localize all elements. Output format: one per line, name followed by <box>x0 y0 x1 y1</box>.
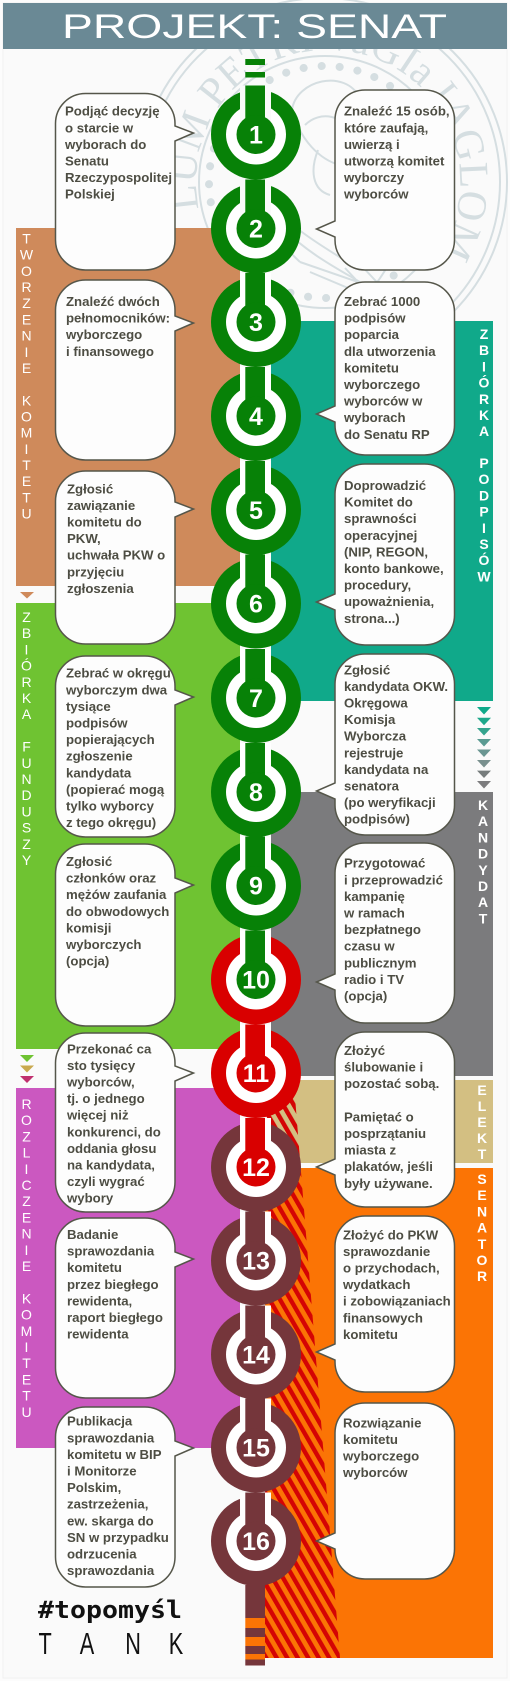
station 12: 12 <box>242 1154 270 1182</box>
panel: elekt: L <box>478 1098 487 1114</box>
bubble: step 4: wyborczego <box>343 377 420 392</box>
bubble: step 2: wyborczy <box>343 170 405 185</box>
bubble: step 4: poparcia <box>344 327 400 342</box>
station 14 <box>211 1306 301 1400</box>
bubble: step 7: (popierać mogą <box>66 782 165 797</box>
bubble: step 11: sto tysięcy <box>67 1058 136 1073</box>
bubble: step 13 <box>56 1218 194 1398</box>
bubble: step 7: tysiące <box>66 699 111 714</box>
bubble: step 3: i finansowego <box>66 344 154 359</box>
panel: zbiorka funduszy: Z <box>22 836 31 852</box>
panel: zbiorka funduszy: R <box>21 674 32 690</box>
panel: kandydat: A <box>478 813 488 829</box>
panel: rozliczenie komitetu: R <box>21 1096 32 1112</box>
bubble: step 2: utworzą komitet <box>344 154 445 168</box>
bubble: step 2: które zaufają, <box>344 120 428 135</box>
bubble: step 5: przyjęciu <box>67 564 124 579</box>
station 5 <box>211 461 301 555</box>
bubble: step 15: sprawozdania <box>67 1563 155 1578</box>
bubble: step 8: podpisów) <box>344 812 410 827</box>
panel: zbiorka funduszy <box>16 603 240 1049</box>
bubble: step 14: i zobowiązaniach <box>343 1294 451 1309</box>
panel: kandydat <box>271 792 493 1076</box>
bubble: step 10: i przeprowadzić <box>344 872 443 887</box>
bubble: step 4 <box>316 282 454 455</box>
bubble: step 4: do Senatu RP <box>344 427 430 442</box>
bubble: step 10: publicznym <box>344 955 417 970</box>
bubble: step 13: rewidenta, <box>67 1293 132 1308</box>
bubble: step 15 <box>56 1407 194 1587</box>
bubble: step 10: bezpłatnego <box>344 922 421 937</box>
panel: zbiorka funduszy: Z <box>22 609 31 625</box>
bubble: step 11: wyborców, <box>66 1074 135 1090</box>
bubble: step 11 <box>56 1033 194 1212</box>
panel: zbiorka funduszy: K <box>22 690 32 706</box>
bubble: step 13: przez biegłego <box>67 1277 159 1292</box>
bubble: step 14: komitetu <box>343 1327 398 1342</box>
bubble: step 11: wybory <box>66 1191 114 1206</box>
bubble: step 4: podpisów <box>344 311 406 326</box>
bubble: step 5: Zgłosić <box>67 481 113 496</box>
bubble: step 13: rewidenta <box>67 1327 129 1342</box>
bubble: step 4: Zebrać 1000 <box>344 294 420 309</box>
panel: senator: N <box>477 1203 487 1219</box>
bubble: step 15: i Monitorze <box>67 1464 137 1478</box>
bubble: step 1: Rzeczypospolitej <box>65 170 172 185</box>
bubble: step 10: czasu w <box>344 939 395 954</box>
panel: zbiorka funduszy: U <box>21 755 32 771</box>
bubble: step 3: Znaleźć dwóch <box>66 294 160 309</box>
bubble: step 14: Złożyć do PKW <box>343 1227 439 1242</box>
station 11: 11 <box>243 1060 269 1088</box>
bubble: step 12: Złożyć <box>344 1043 385 1058</box>
bubble: step 13: komitetu <box>67 1260 122 1275</box>
bubble: step 12 <box>316 1032 454 1207</box>
station 15: 15 <box>242 1434 270 1462</box>
bubble: step 6 <box>316 464 454 645</box>
panel: rozliczenie komitetu: C <box>21 1177 32 1193</box>
bubble: step 7: Zebrać w okręgu <box>66 666 171 681</box>
panel: zbiorka podpisow <box>271 321 493 701</box>
panel: rozliczenie komitetu: K <box>22 1290 32 1306</box>
arrow: to zbiorka funduszy <box>20 592 34 598</box>
path tail with stripes <box>245 1585 265 1666</box>
logo: #topomysl tank: N <box>125 1626 141 1661</box>
panel: tworzenie komitetu: M <box>21 425 32 441</box>
bubble: step 1: wyborach do <box>64 137 146 152</box>
bubble: step 4: wyborach <box>343 410 406 425</box>
station 16 <box>211 1492 301 1586</box>
bubble: step 7: zgłoszenie <box>66 749 133 764</box>
panel: elekt: K <box>477 1130 487 1146</box>
station 11 <box>211 1024 301 1118</box>
bubble: step 5: zawiązanie <box>67 498 135 513</box>
bubble: step 16: wyborczego <box>342 1448 419 1464</box>
panel: zbiorka funduszy: D <box>21 787 32 803</box>
top dashes of the path <box>245 59 265 78</box>
bubble: step 9: do obwodowych <box>66 904 169 919</box>
panel: rozliczenie komitetu: I <box>25 1339 28 1355</box>
bubble: step 7: wyborczym dwa <box>65 682 168 697</box>
bubble: step 7: z tego okręgu) <box>66 815 156 830</box>
bubble: step 6: operacyjnej <box>344 528 417 543</box>
station 4 <box>211 367 301 461</box>
bubble: step 1: Polskiej <box>65 187 115 202</box>
bubble: step 4: komitetu <box>344 360 399 375</box>
bubble: step 10: w ramach <box>343 906 405 920</box>
panel: tworzenie komitetu: T <box>22 489 31 505</box>
bubble: step 9 <box>56 844 194 1026</box>
station 1: 1 <box>249 122 263 150</box>
panel: rozliczenie komitetu <box>16 1088 240 1448</box>
station 6 <box>211 554 301 648</box>
panel: elekt <box>271 1080 493 1163</box>
bubble: step 16: komitetu <box>343 1432 398 1447</box>
panel: kandydat: D <box>478 846 488 862</box>
station 13 <box>211 1212 301 1306</box>
bubble: step 6: upoważnienia, <box>344 594 434 609</box>
panel: tworzenie komitetu: O <box>21 263 32 279</box>
bubble: step 3: wyborczego <box>65 327 142 342</box>
bubble: step 12: plakatów, jeśli <box>344 1159 433 1174</box>
logo: #topomysl tank: K <box>169 1626 183 1661</box>
bubble: step 1: Senatu <box>65 154 109 168</box>
arrows: to kandydat <box>477 707 491 788</box>
bubble: step 2: uwierzą i <box>344 137 400 152</box>
panel: rozliczenie komitetu: T <box>22 1355 31 1371</box>
panel: tworzenie komitetu: T <box>22 457 31 473</box>
panel: rozliczenie komitetu: Z <box>22 1193 31 1209</box>
bubble: step 7: popierających <box>66 732 155 747</box>
bubble: step 11: czyli wygrać <box>67 1174 145 1189</box>
bubble: step 6: (NIP, REGON, <box>344 544 428 559</box>
bubble: step 11: Przekonać ca <box>67 1041 152 1056</box>
bubble: step 12: Pamiętać o <box>344 1109 414 1124</box>
panel: zbiorka funduszy: B <box>22 625 31 641</box>
station 13: 13 <box>242 1248 270 1276</box>
panel: kandydat: Y <box>478 862 488 878</box>
panel: tworzenie komitetu: I <box>25 344 28 360</box>
bubble: step 9: członków oraz <box>66 871 157 886</box>
panel: zbiorka funduszy: Y <box>22 852 32 868</box>
panel: zbiorka podpisow: P <box>479 455 489 471</box>
panel: tworzenie komitetu: E <box>22 473 31 489</box>
panel: rozliczenie komitetu: O <box>21 1307 32 1323</box>
bubble: step 13: sprawozdania <box>67 1244 155 1259</box>
panel: tworzenie komitetu <box>16 228 240 586</box>
panel: kandydat: N <box>478 829 488 845</box>
panel: elekt: E <box>477 1114 487 1130</box>
station 10: 10 <box>242 966 270 994</box>
panel: zbiorka podpisow: Ó <box>479 374 490 391</box>
bubble: step 15: Polskim, <box>67 1480 121 1495</box>
panel: rozliczenie komitetu: L <box>23 1145 31 1161</box>
title banner <box>3 3 507 49</box>
bubble: step 4: wyborców w <box>343 394 423 409</box>
bubble: step 12: miasta z <box>344 1143 396 1158</box>
station 14: 14 <box>242 1342 270 1370</box>
panel: kandydat: D <box>478 878 488 894</box>
panel: zbiorka podpisow: O <box>479 471 490 487</box>
panel: zbiorka podpisow: D <box>479 487 489 503</box>
panel: zbiorka podpisow: I <box>482 358 486 374</box>
panel: senator: O <box>477 1252 488 1268</box>
panel: tworzenie komitetu: E <box>22 311 31 327</box>
logo: #topomysl tank: #topomyśl <box>38 1596 182 1624</box>
station 8 <box>211 743 301 837</box>
bubble: step 1 <box>56 94 194 270</box>
panel: rozliczenie komitetu: Z <box>22 1128 31 1144</box>
panel: tworzenie komitetu: W <box>20 247 34 263</box>
bubble: step 8: Zgłosić <box>344 662 390 677</box>
logo: #topomysl tank <box>38 1596 183 1661</box>
bubble: step 15: komitetu w BIP <box>67 1447 162 1462</box>
station 10 <box>211 930 301 1024</box>
station 15 <box>211 1398 301 1492</box>
panel: zbiorka funduszy: I <box>25 641 28 657</box>
bubble: step 6: konto bankowe, <box>344 561 444 576</box>
bubble: step 14: sprawozdanie <box>343 1244 430 1259</box>
bubble: step 8: (po weryfikacji <box>344 795 436 810</box>
panel: kandydat: A <box>478 894 488 910</box>
station 16: 16 <box>242 1528 270 1556</box>
panel: zbiorka podpisow: Z <box>480 326 489 342</box>
bubble: step 8: rejestruje <box>344 745 403 760</box>
station 2: 2 <box>249 216 263 244</box>
bubble: step 7: tylko wyborcy <box>66 798 155 814</box>
bubble: step 5: komitetu do <box>67 514 142 530</box>
panel: zbiorka podpisow: Ó <box>479 551 490 568</box>
bubble: step 9: (opcja) <box>66 954 109 969</box>
bubble: step 13: raport biegłego <box>67 1310 163 1325</box>
bubble: step 5: PKW, <box>67 531 101 546</box>
bubble: step 12: były używane. <box>344 1176 433 1191</box>
panel: rozliczenie komitetu: E <box>22 1258 31 1274</box>
panel: zbiorka funduszy: N <box>21 771 32 787</box>
bubble: step 8: Okręgowa <box>344 696 408 710</box>
bubble: step 10: radio i TV <box>344 972 404 987</box>
panel: zbiorka funduszy: Ó <box>21 658 32 674</box>
bubble: step 5: zgłoszenia <box>67 581 134 596</box>
bubble: step 8: senatora <box>344 778 400 794</box>
panel: rozliczenie komitetu: N <box>21 1226 32 1242</box>
panel: rozliczenie komitetu: E <box>22 1371 31 1387</box>
panel: zbiorka podpisow: P <box>479 504 489 520</box>
bubble: step 12: pozostać sobą. <box>344 1076 439 1091</box>
panel: zbiorka podpisow: K <box>479 407 489 423</box>
panel: zbiorka funduszy: S <box>22 820 31 836</box>
panel: zbiorka podpisow: I <box>482 520 486 536</box>
panel: rozliczenie komitetu: I <box>25 1161 28 1177</box>
panel: rozliczenie komitetu: O <box>21 1112 32 1128</box>
panel: tworzenie komitetu: E <box>22 360 31 376</box>
panel: rozliczenie komitetu: I <box>25 1242 28 1258</box>
station 2 <box>211 180 301 274</box>
station 8: 8 <box>249 779 263 807</box>
bubble: step 10: Przygotować <box>344 856 425 871</box>
bubble: step 16: Rozwiązanie <box>343 1415 421 1430</box>
bubble: step 11: oddania głosu <box>67 1141 156 1156</box>
bubble: step 2: wyborców <box>343 187 409 202</box>
panel: tworzenie komitetu: R <box>21 279 32 295</box>
bubble: step 12: ślubowanie i <box>344 1060 423 1075</box>
bubble: step 11: konkurenci, do <box>67 1124 161 1139</box>
bubble: step 8 <box>316 654 454 835</box>
bubble: step 9: mężów zaufania <box>66 887 167 902</box>
station 12 <box>211 1118 301 1212</box>
station 7: 7 <box>249 685 263 713</box>
bubble: step 12: posprzątaniu <box>344 1126 426 1141</box>
panel: kandydat: K <box>478 797 488 813</box>
panel: senator: E <box>477 1187 487 1203</box>
bubble: step 8: Komisja <box>344 712 396 727</box>
bubble: step 6: sprawności <box>344 511 417 526</box>
panel: zbiorka funduszy: F <box>22 739 31 755</box>
bubble: step 2: Znaleźć 15 osób, <box>344 104 450 119</box>
bubble: step 1: Podjąć decyzję <box>65 104 160 119</box>
bubble: step 13: Badanie <box>67 1227 118 1242</box>
bubble: step 6: strona...) <box>344 611 400 626</box>
bubble: step 7: podpisów <box>66 716 128 730</box>
station 6: 6 <box>249 590 263 618</box>
bubble: step 11: tj. o jednego <box>67 1091 145 1106</box>
panel: rozliczenie komitetu: T <box>22 1388 31 1404</box>
bubble: step 5: uchwała PKW o <box>67 548 165 563</box>
panel: tworzenie komitetu: U <box>21 506 32 522</box>
bubble: step 1: o starcie w <box>65 120 134 135</box>
station 3: 3 <box>249 309 263 337</box>
bubble: step 14: o przychodach, <box>343 1260 440 1276</box>
bubble: step 2 <box>316 90 454 270</box>
station 7 <box>211 649 301 743</box>
bubble: step 11: więcej niż <box>66 1108 129 1123</box>
station 1 <box>211 86 301 180</box>
arrows: to rozliczenie komitetu <box>20 1055 34 1083</box>
panel: senator <box>265 1168 493 1658</box>
panel: zbiorka podpisow: S <box>479 536 489 552</box>
panel: senator: R <box>477 1268 487 1284</box>
bubble: step 8: kandydata OKW. <box>344 679 448 694</box>
bubble: step 9: komisji <box>66 920 111 935</box>
panel: elekt: E <box>477 1082 487 1098</box>
bubble: step 7: kandydata <box>66 765 132 780</box>
logo: #topomysl tank: A <box>80 1626 94 1661</box>
bubble: step 8: kandydata na <box>344 762 429 777</box>
bubble: step 9: Zgłosić <box>66 854 112 869</box>
station 9: 9 <box>249 872 263 900</box>
title banner: PROJEKT: SENAT <box>62 8 447 46</box>
panel: tworzenie komitetu: Z <box>22 295 31 311</box>
panel: tworzenie komitetu: T <box>22 230 31 246</box>
panel: rozliczenie komitetu: M <box>21 1323 32 1339</box>
panel: zbiorka podpisow: A <box>479 423 489 439</box>
panel: elekt: T <box>478 1146 487 1162</box>
bubble: step 11: na kandydata, <box>67 1158 155 1172</box>
bubble: step 10: kampanię <box>344 889 405 904</box>
bubble: step 14: finansowych <box>343 1310 423 1325</box>
panel: senator: T <box>478 1236 487 1252</box>
bubble: step 6: procedury, <box>344 578 411 593</box>
station 9 <box>211 836 301 930</box>
background seal: LUM PETRI VaGIa IAGLOM <box>176 49 488 264</box>
bubble: step 15: SN w przypadku <box>67 1530 169 1545</box>
panel: senator: A <box>477 1220 487 1236</box>
panel: tworzenie komitetu: I <box>25 441 28 457</box>
bubble: step 6: Komitet do <box>344 495 413 510</box>
station 4: 4 <box>249 403 263 431</box>
bubble: step 5 <box>56 471 194 644</box>
panel: zbiorka podpisow: W <box>477 568 491 584</box>
bubble: step 10 <box>316 843 454 1023</box>
bubble: step 10: (opcja) <box>344 988 387 1004</box>
bubble: step 4: dla utworzenia <box>344 344 436 359</box>
logo: #topomysl tank: T <box>38 1626 52 1661</box>
bubble: step 15: Publikacja <box>67 1414 133 1429</box>
bubble: step 16 <box>316 1403 454 1579</box>
bubble: step 15: odrzucenia <box>67 1546 137 1562</box>
panel: senator: S <box>477 1171 487 1187</box>
panel: tworzenie komitetu: K <box>22 392 32 408</box>
panel: zbiorka funduszy: U <box>21 803 32 819</box>
panel: rozliczenie komitetu: U <box>21 1404 32 1420</box>
bubble: step 15: ew. skarga do <box>67 1513 154 1528</box>
station 3 <box>211 273 301 367</box>
panel: tworzenie komitetu: N <box>21 328 32 344</box>
panel: kandydat: T <box>479 910 488 926</box>
panel: zbiorka podpisow: B <box>479 342 489 358</box>
bubble: step 15: zastrzeżenia, <box>67 1497 148 1512</box>
bubble: step 6: Doprowadzić <box>344 478 426 493</box>
bubble: step 14 <box>316 1216 454 1392</box>
hatched transition band <box>265 1097 340 1658</box>
panel: zbiorka funduszy: A <box>22 706 32 722</box>
bubble: step 7 <box>56 656 194 837</box>
bubble: step 8: Wyborcza <box>344 729 407 744</box>
panel: zbiorka podpisow: R <box>479 391 489 407</box>
panel: tworzenie komitetu: O <box>21 408 32 424</box>
bubble: step 14: wydatkach <box>342 1277 410 1292</box>
bubble: step 3: pełnomocników: <box>66 311 170 326</box>
panel: rozliczenie komitetu: E <box>22 1209 31 1225</box>
bubble: step 15: sprawozdania <box>67 1430 155 1445</box>
bubble: step 9: wyborczych <box>65 937 142 952</box>
station 5: 5 <box>249 497 263 525</box>
bubble: step 16: wyborców <box>342 1465 408 1480</box>
bubble: step 3 <box>56 280 194 460</box>
